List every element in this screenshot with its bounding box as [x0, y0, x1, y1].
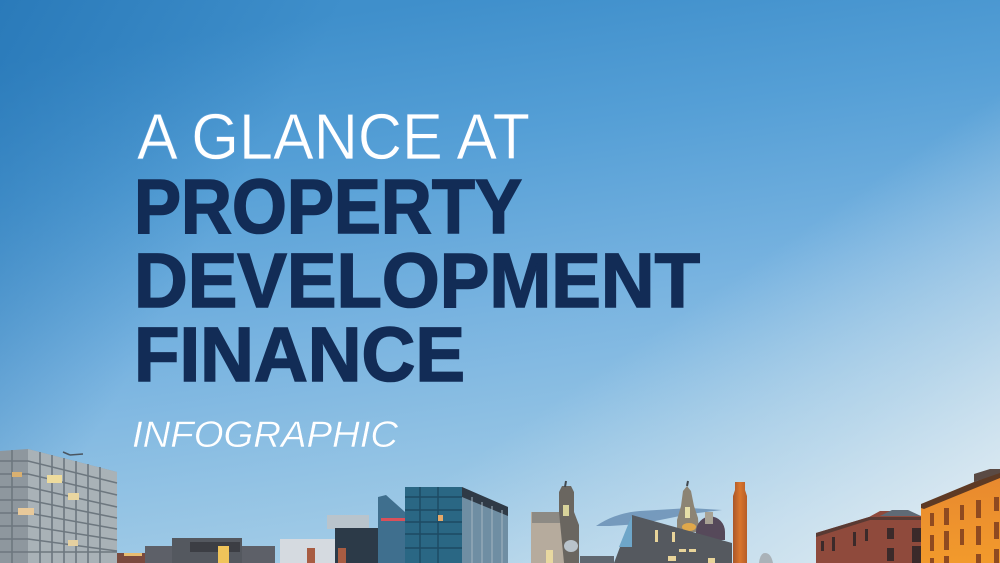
- skyline: Albert Dock warehouses: [816, 469, 1000, 563]
- building: low-rise dark block: [117, 538, 275, 563]
- skyline: left waterfront buildings: [0, 449, 508, 563]
- building: brick chimney: [733, 482, 747, 563]
- building: red brick warehouse: [816, 510, 921, 563]
- title: PROPERTY DEVELOPMENT FINANCE: PROPERTY: [134, 164, 522, 250]
- building: Port of Liverpool tower: [531, 481, 614, 563]
- title: A GLANCE AT: A GLANCE AT: [137, 100, 530, 173]
- cloud wisp: [596, 508, 722, 526]
- building: left apartment tower: [0, 449, 117, 563]
- building: blue angular tower: [378, 495, 405, 563]
- building: white balcony block: [280, 515, 395, 563]
- title: PROPERTY DEVELOPMENT FINANCE: [134, 164, 700, 398]
- building: orange lit warehouse: [921, 469, 1000, 563]
- building: Museum of Liverpool: [614, 515, 732, 563]
- title: PROPERTY DEVELOPMENT FINANCE: FINANCE: [134, 312, 465, 398]
- skyline: Three Graces and Pier Head: [531, 481, 773, 563]
- subtitle: INFOGRAPHIC: INFOGRAPHIC: [132, 414, 398, 455]
- title: PROPERTY DEVELOPMENT FINANCE: DEVELOPMENT: [134, 238, 700, 324]
- small distant dome: [759, 553, 773, 563]
- building: Royal Liver Building dome: [677, 481, 725, 540]
- building: dark glass office: [405, 487, 508, 563]
